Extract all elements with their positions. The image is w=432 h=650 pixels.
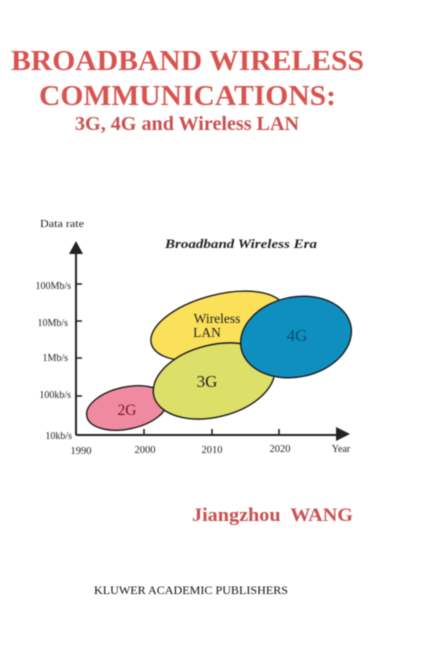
- bubble: 4G: [233, 286, 359, 388]
- y axis tick labels: 100kb/s: [39, 390, 71, 401]
- bubble: 2G: 2G: [118, 402, 136, 419]
- bubble: 3G: [145, 331, 283, 431]
- publisher: KLUWER ACADEMIC PUBLISHERS: [94, 583, 288, 597]
- x axis arrow: [76, 427, 350, 441]
- title: 3G, 4G and Wireless LAN: [75, 113, 300, 135]
- bubble: Wireless LAN: LAN: [193, 325, 221, 340]
- y axis label: Data rate: [40, 219, 85, 230]
- y axis tick labels: 100Mb/s: [35, 281, 71, 292]
- bubble: 2G: [83, 379, 171, 437]
- chart heading: Broadband Wireless Era: [164, 236, 318, 251]
- title: BROADBAND WIRELESS: [11, 46, 364, 77]
- bubble: 3G: 3G: [197, 372, 217, 391]
- y axis arrow: [69, 241, 83, 435]
- y axis tick labels: 10kb/s: [45, 431, 72, 442]
- x axis tick labels: 2010: [202, 445, 222, 456]
- author: Jiangzhou WANG: [192, 505, 353, 526]
- bubble: 4G: 4G: [287, 326, 307, 345]
- x axis tick labels: 1990: [70, 446, 92, 457]
- y axis tick labels: [35, 281, 72, 442]
- bubble: Wireless LAN: Wireless: [194, 311, 240, 326]
- title: COMMUNICATIONS:: [39, 81, 336, 112]
- x axis tick labels: [70, 444, 351, 457]
- bubble: Wireless LAN: [143, 278, 293, 374]
- chart: broadband wireless era: [35, 219, 359, 457]
- y axis tick labels: 1Mb/s: [42, 353, 68, 364]
- title: [11, 46, 364, 135]
- x axis tick labels: 2020: [270, 444, 290, 455]
- x axis tick labels: Year: [332, 444, 351, 455]
- y axis tick labels: 10Mb/s: [37, 318, 68, 329]
- x axis tick labels: 2000: [134, 445, 156, 456]
